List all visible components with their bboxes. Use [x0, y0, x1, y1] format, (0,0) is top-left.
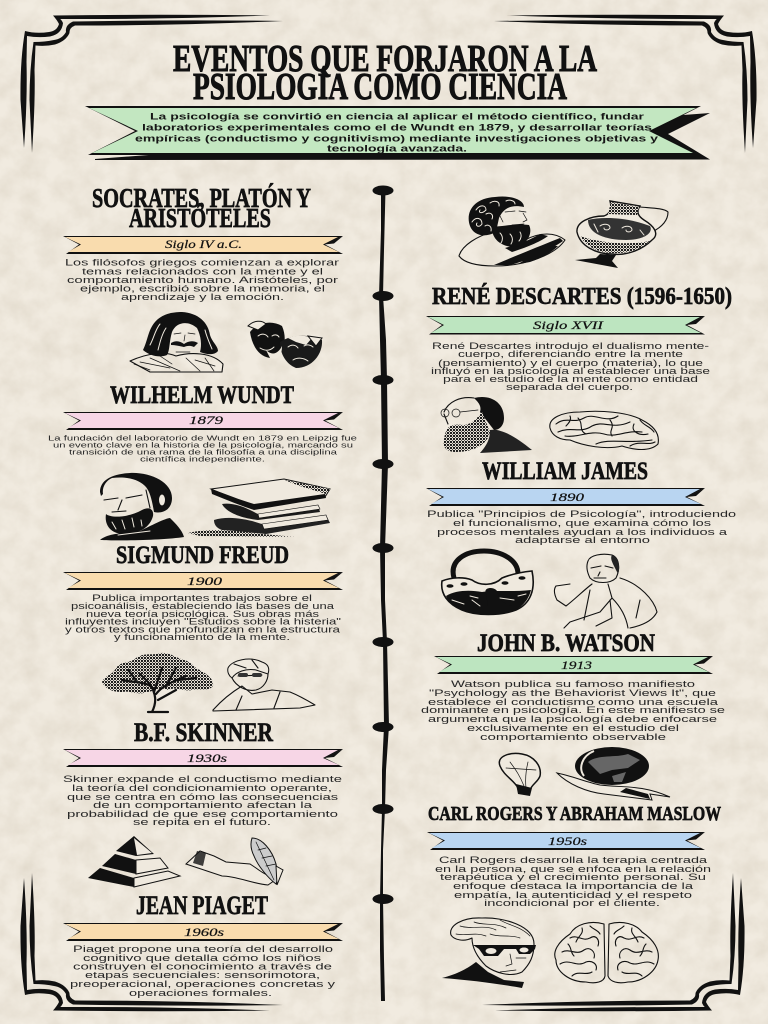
- icon: portrait with long hair: [130, 312, 223, 372]
- icon: hand writing with quill: [186, 838, 283, 885]
- text block: procesos mentales ayudan a los individuos a: [437, 527, 727, 537]
- ribbon: 1890: 1890: [550, 492, 584, 504]
- text block: y otros textos que profundizan en la estructura: [65, 624, 340, 634]
- heading: WILLIAM JAMES: [482, 458, 648, 485]
- heading: ARISTÓTELES: [129, 203, 271, 233]
- ornamental frame: top left corner: [20, 15, 283, 153]
- text block: [435, 855, 711, 908]
- icon: light bulb: [499, 754, 540, 796]
- text block: establece el conductismo como una escuela: [428, 697, 718, 707]
- panel: Sigmund Freud: [63, 542, 343, 712]
- ribbon: 1913: [434, 656, 713, 674]
- text block: se repita en el futuro.: [133, 817, 271, 827]
- text block: [70, 944, 336, 998]
- intro banner: [85, 106, 710, 160]
- ribbon: 1950s: [427, 832, 705, 850]
- ribbon: Siglo XVII: [426, 316, 705, 334]
- heading: B.F. SKINNER: [134, 718, 273, 747]
- text block: incondicional por el cliente.: [484, 898, 660, 908]
- text block: La fundación del laboratorio de Wundt en 1879 en Leipzig fue: [48, 434, 357, 442]
- text block: de un comportamiento afectan la: [93, 800, 312, 810]
- heading: [92, 183, 311, 233]
- text block: argumenta que la psicología debe enfocarse: [428, 714, 717, 724]
- text block: [48, 434, 357, 464]
- heading: JOHN B. WATSON: [477, 630, 655, 657]
- ribbon: 1900: 1900: [187, 576, 222, 588]
- ribbon: 1900: [63, 572, 343, 590]
- text block: un evento clave en la historia de la psicología, marcando su: [53, 440, 353, 450]
- icon: man with glasses and coat: [213, 659, 315, 711]
- text block: [65, 593, 341, 642]
- ribbon: Siglo IV a.C.: Siglo IV a.C.: [165, 239, 242, 251]
- text block: la teoría del condicionamiento operante,: [72, 783, 332, 793]
- text block: cuerpo, diferenciando entre la mente: [458, 349, 683, 359]
- heading: SIGMUND FREUD: [116, 542, 289, 569]
- ribbon: Siglo XVII: Siglo XVII: [533, 320, 605, 332]
- intro banner: empíricas (conductismo y cognitivismo) mediante investigaciones objetivas y: [135, 134, 659, 144]
- text block: preoperacional, operaciones concretas y: [70, 979, 336, 989]
- heading: JEAN PIAGET: [136, 891, 268, 920]
- icon: theatre masks: [248, 321, 322, 368]
- text block: separada del cuerpo.: [506, 382, 633, 392]
- text block: Carl Rogers desarrolla la terapia centrada: [439, 855, 707, 865]
- text block: "Psychology as the Behaviorist Views It", que: [429, 688, 716, 698]
- title: EVENTOS QUE FORJARON A LA: [173, 38, 597, 80]
- ribbon: 1960s: 1960s: [184, 927, 225, 939]
- intro banner: laboratorios experimentales como el de Wundt en 1879, y desarrollar teorías: [142, 122, 652, 134]
- text block: Skinner expande el conductismo mediante: [63, 774, 342, 784]
- text block: Publica importantes trabajos sobre el: [92, 593, 312, 603]
- panel: Jean Piaget: [63, 891, 343, 998]
- title: PSIOLOGÍA COMO CIENCIA: [193, 66, 567, 108]
- text block: empatía, la autenticidad y el respeto: [454, 890, 692, 900]
- text block: influyentes incluyen "Estudios sobre la histeria": [65, 616, 341, 626]
- icon: hand holding globe: [557, 747, 670, 800]
- timeline spine with dots: [372, 186, 394, 1001]
- text block: [431, 341, 710, 392]
- text block: ejemplo, escribió sobre la memoria, el: [80, 284, 325, 294]
- text block: temas relacionados con la mente y el: [82, 266, 323, 276]
- text block: comportamiento humano. Aristóteles, por: [67, 275, 338, 285]
- icon: pyramid: [88, 836, 180, 887]
- ribbon: 1890: [426, 488, 705, 506]
- text block: exclusivamente en el estudio del: [467, 723, 679, 733]
- text block: adaptarse al entorno: [515, 535, 650, 545]
- icon: brain side view: [550, 411, 658, 450]
- ornamental frame: bottom left corner: [20, 873, 283, 1011]
- ribbon: 1879: [63, 412, 343, 430]
- text block: transición de una rama de la filosofía a una disciplina: [69, 448, 338, 456]
- heading: SOCRATES, PLATÓN Y: [92, 183, 311, 213]
- panel: Sócrates, Platón y Aristóteles: [63, 183, 343, 372]
- text block: [421, 679, 725, 742]
- title: [173, 38, 597, 108]
- text block: en la persona, que se enfoca en la relación: [435, 864, 711, 874]
- text block: probabilidad de que ese comportamiento: [67, 809, 338, 819]
- text block: (pensamiento) y el cuerpo (materia), lo que: [438, 358, 703, 368]
- ribbon: 1960s: [63, 923, 343, 941]
- panel: William James: [426, 458, 736, 628]
- icon: brain top view: [555, 922, 658, 983]
- heading: RENÉ DESCARTES (1596-1650): [432, 284, 732, 310]
- icon: stack of books: [188, 479, 330, 537]
- text block: René Descartes introdujo el dualismo mente-: [432, 341, 709, 351]
- text block: terapéutica y el crecimiento personal. Su: [440, 872, 706, 882]
- ornamental frame: bottom right corner: [482, 873, 745, 1011]
- icon: greek vase: [575, 201, 668, 268]
- panel: Sócrates bust and vase illustrations: [459, 197, 668, 268]
- intro banner: tecnología avanzada.: [327, 144, 467, 154]
- icon: tree: [102, 653, 213, 712]
- icon: bearded man with glasses: [441, 397, 532, 453]
- text block: el funcionalismo, que examina cómo los: [453, 518, 712, 528]
- text block: Watson publica su famoso manifiesto: [451, 679, 695, 689]
- text block: [63, 774, 342, 827]
- text block: psicoanálisis, estableciendo las bases de una: [71, 601, 334, 611]
- intro banner: La psicología se convirtió en ciencia al aplicar el método científico, fundar: [150, 112, 644, 122]
- panel: B.F. Skinner: [63, 718, 343, 887]
- text block: científica independiente.: [140, 454, 265, 464]
- panel: René Descartes: [426, 284, 732, 453]
- text block: dominante en psicología. En este manifiesto se: [421, 705, 725, 715]
- text block: construyen el conocimiento a través de: [73, 962, 332, 972]
- text block: Los filósofos griegos comienzan a explorar: [65, 258, 339, 268]
- text block: enfoque destaca la importancia de la: [453, 881, 693, 891]
- ornamental frame: top right corner: [494, 15, 757, 153]
- icon: man with heavy glasses: [442, 918, 536, 988]
- text block: aprendizaje y la emoción.: [121, 292, 284, 302]
- text block: [65, 258, 339, 302]
- text block: [427, 509, 736, 545]
- icon: elderly man in suit: [554, 554, 657, 628]
- icon: Wundt portrait: [100, 473, 184, 540]
- ribbon: Siglo IV a.C.: [63, 236, 343, 254]
- text block: comportamiento observable: [480, 732, 666, 742]
- icon: padlock: [442, 551, 533, 615]
- ribbon: 1913: 1913: [561, 660, 592, 672]
- panel: Wilhelm Wundt: [48, 382, 357, 540]
- ribbon: 1950s: 1950s: [548, 836, 588, 848]
- text block: operaciones formales.: [129, 988, 272, 998]
- panel: John B. Watson: [421, 630, 725, 800]
- text block: nueva teoría psicológica. Sus obras más: [86, 609, 320, 619]
- text block: Publica "Principios de Psicología", introduciendo: [427, 509, 736, 519]
- ribbon: 1879: 1879: [189, 415, 223, 427]
- text block: cognitivo que detalla cómo los niños: [83, 953, 322, 963]
- text block: y funcionamiento de la mente.: [114, 632, 290, 642]
- text block: influyó en la psicología al establecer una base: [431, 366, 710, 376]
- icon: greek philosopher bust: [459, 197, 565, 266]
- text block: que se centra en cómo las consecuencias: [67, 792, 339, 802]
- ribbon: 1930s: 1930s: [187, 753, 228, 765]
- text block: etapas secuenciales: sensorimotora,: [85, 970, 320, 980]
- ribbon: 1930s: [63, 749, 343, 767]
- text block: para el estudio de la mente como entidad: [443, 374, 698, 384]
- heading: WILHELM WUNDT: [110, 382, 294, 409]
- panel: Carl Rogers y Abraham Maslow: [427, 803, 721, 988]
- text block: Piaget propone una teoría del desarrollo: [73, 944, 333, 954]
